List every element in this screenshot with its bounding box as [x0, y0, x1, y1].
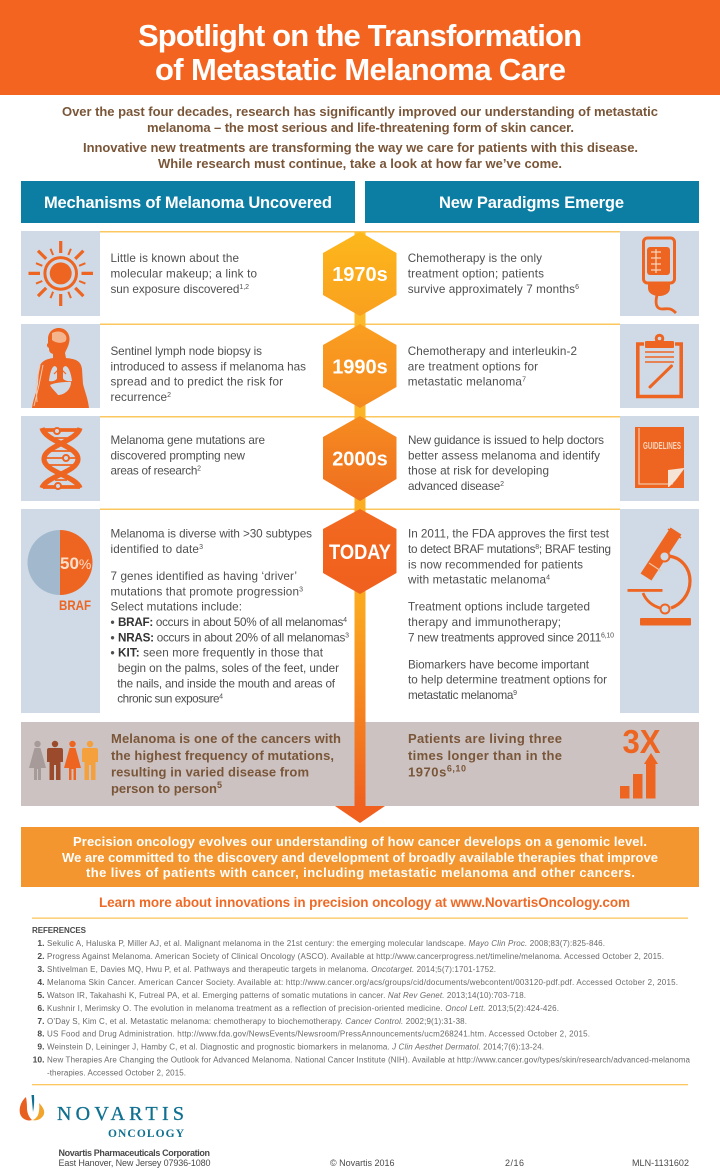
mutation list: •	[110, 631, 115, 644]
icon: body	[21, 324, 100, 408]
references: 7.	[37, 1016, 44, 1026]
mutation list	[110, 616, 349, 706]
callout: survival: 6,10	[447, 764, 466, 774]
text: today mechanisms: 7 genes identified as having ‘driver’	[110, 570, 297, 583]
references: 9.	[37, 1042, 44, 1052]
text: today mechanisms: 3	[299, 586, 303, 593]
text: 1990s mechanisms: 2	[167, 392, 171, 399]
icon: IV bag	[620, 231, 699, 316]
references	[32, 926, 691, 1078]
references: 10.	[33, 1055, 44, 1065]
text: 1970s mechanisms	[110, 252, 257, 296]
callout: mutations	[111, 731, 341, 796]
hexagon: 1970s	[323, 232, 396, 316]
mutation list: 3	[345, 632, 349, 639]
hexagon: 1990s	[323, 324, 396, 408]
footer	[58, 1148, 689, 1168]
text: 1990s mechanisms	[110, 345, 306, 404]
text: 1970s mechanisms: molecular makeup; a link to	[110, 268, 257, 280]
text: 2000s mechanisms: areas of research	[110, 465, 197, 478]
icon: guidelines book: GUIDELINES	[643, 441, 681, 452]
references: 4.	[37, 977, 44, 987]
text: today paradigms: 8	[535, 544, 539, 551]
title banner: of Metastatic Melanoma Care	[155, 52, 566, 87]
rule	[32, 918, 688, 919]
references: Watson IR, Takahashi K, Futreal PA, et al. Emerging patterns of somatic mutations in cancer. Nat Rev Genet. 2013;14(10):703-718.	[47, 991, 526, 1000]
hexagon: today: TODAY	[329, 541, 391, 564]
row rule today	[100, 508, 620, 510]
mutation list: KIT: seen more frequently in those that	[118, 647, 324, 660]
text: 2000s mechanisms: Melanoma gene mutations are	[110, 434, 265, 447]
banner: precision oncology: the lives of patients with cancer, including metastatic melanoma and other cancers.	[86, 865, 635, 880]
text: today paradigms: is now recommended for patients	[408, 558, 583, 571]
hexagon: 1990s: 1990s	[332, 356, 388, 378]
heading: mechanisms: Mechanisms of Melanoma Uncovered	[44, 194, 332, 212]
intro text: While research must continue, take a look at how far we’ve come.	[158, 156, 562, 171]
references: US Food and Drug Administration. http://www.fda.gov/NewsEvents/Newsroom/PressAnnouncements/ucm268241.htm. Accessed October 2, 2015.	[47, 1030, 590, 1039]
references: REFERENCES	[32, 926, 87, 935]
icon: people	[29, 741, 98, 780]
text: today mechanisms: Melanoma is diverse with >30 subtypes	[110, 528, 312, 541]
footer: Novartis Pharmaceuticals Corporation	[58, 1148, 210, 1158]
timeline arrow	[335, 232, 385, 823]
callout: mutations: the highest frequency of mutations,	[111, 748, 334, 763]
intro text: Over the past four decades, research has significantly improved our understanding of metastatic	[62, 104, 658, 119]
text: today paradigms: metastatic melanoma	[408, 689, 513, 702]
text: 2000s paradigms	[408, 434, 604, 493]
text: 1990s mechanisms: introduced to assess if melanoma has	[110, 360, 306, 373]
callout: mutations: 5	[217, 780, 222, 790]
text: 2000s mechanisms	[110, 434, 265, 478]
references: -therapies. Accessed October 2, 2015.	[47, 1069, 186, 1078]
logo: Novartis Oncology	[20, 1095, 185, 1140]
callout: survival	[408, 731, 562, 780]
band: summary	[21, 722, 699, 806]
references: Sekulic A, Haluska P, Miller AJ, et al. Malignant melanoma in the 21st century: the emerging molecular landscape. Mayo Clin Proc. 2008;83(7):825-846.	[47, 939, 605, 948]
text: today paradigms: 4	[546, 575, 550, 582]
text: today paradigms: therapy and immunotherapy;	[408, 616, 561, 629]
row rule 1990s	[100, 324, 620, 325]
text: 1970s mechanisms: 1,2	[239, 284, 249, 291]
row rule 2000s	[100, 416, 620, 418]
text: 1990s paradigms: are treatment options for	[408, 360, 538, 373]
text: 1970s paradigms: 6	[575, 284, 579, 291]
text: today paradigms: Treatment options include targeted	[408, 601, 590, 614]
text: today paradigms	[407, 528, 614, 702]
icon: BRAF pie chart: BRAF	[59, 597, 91, 613]
logo: Novartis Oncology: NOVARTIS	[57, 1103, 184, 1125]
row rule 1970s	[100, 231, 620, 232]
text: 1970s paradigms: treatment option; patients	[408, 268, 544, 280]
text: 1970s paradigms: survive approximately 7 months	[408, 283, 575, 296]
text: today paradigms: with metastatic melanoma	[408, 574, 546, 587]
icon: BRAF pie chart	[21, 509, 100, 713]
icon: DNA	[21, 416, 100, 501]
text: today paradigms: 9	[513, 690, 517, 697]
references: 2.	[37, 951, 44, 961]
mutation list: NRAS: occurs in about 20% of all melanomas	[118, 631, 345, 644]
text: today paradigms: to detect BRAF mutations	[408, 543, 535, 556]
text: 1990s paradigms	[408, 345, 577, 389]
text: 2000s paradigms: 2	[500, 481, 504, 488]
mutation list: begin on the palms, soles of the feet, under	[118, 662, 339, 675]
mutation list: chronic sun exposure	[117, 693, 220, 706]
hexagon: 2000s: 2000s	[332, 448, 388, 470]
mutation list: 4	[343, 617, 347, 624]
banner: precision oncology: We are committed to the discovery and development of broadly available therapies that improve	[62, 850, 658, 865]
text: 2000s mechanisms: 2	[197, 466, 201, 473]
mutation list: BRAF: occurs in about 50% of all melanomas	[118, 616, 343, 629]
banner: precision oncology: Precision oncology evolves our understanding of how cancer develops on a genomic level.	[73, 834, 647, 849]
banner: precision oncology	[21, 827, 699, 887]
mutation list: •	[110, 616, 115, 629]
icon: flame	[20, 1095, 44, 1120]
text: today mechanisms	[110, 528, 349, 706]
title banner	[0, 0, 720, 95]
intro text	[62, 104, 658, 171]
mutation list: 4	[219, 694, 223, 701]
callout: mutations: resulting in varied disease from	[111, 765, 309, 780]
icon: 3X growth: 3X	[622, 723, 660, 760]
text: 1990s paradigms: Chemotherapy and interleukin-2	[408, 345, 577, 358]
text: today paradigms: ; BRAF testing	[539, 543, 611, 556]
heading: paradigms	[365, 181, 699, 223]
text: 1990s paradigms: metastatic melanoma	[408, 376, 522, 389]
text: today mechanisms: identified to date	[110, 543, 199, 556]
icon: clipboard	[620, 324, 699, 408]
references: Kushnir I, Merimsky O. The evolution in melanoma treatment as a reflection of precision-oriented medicine. Oncol Lett. 2013;5(2):424-426.	[47, 1004, 559, 1013]
text: today paradigms: to help determine treatment options for	[408, 674, 607, 687]
text: 1990s mechanisms: spread and to predict the risk for	[110, 376, 283, 389]
icon: sun	[21, 231, 100, 316]
footer: East Hanover, New Jersey 07936-1080	[58, 1158, 210, 1168]
text: 2000s paradigms: New guidance is issued to help doctors	[408, 434, 604, 447]
logo: Novartis Oncology: ONCOLOGY	[108, 1128, 185, 1140]
rule	[32, 1084, 688, 1085]
footer: © Novartis 2016	[330, 1158, 394, 1168]
mutation list: •	[110, 647, 115, 660]
text: 1970s paradigms: Chemotherapy is the only	[408, 252, 542, 265]
icon: BRAF pie chart: 50%	[60, 554, 91, 573]
references: O’Day S, Kim C, et al. Metastatic melanoma: chemotherapy to biochemotherapy. Cancer Control. 2002;9(1):31-38.	[47, 1017, 467, 1026]
references: 3.	[37, 964, 44, 974]
text: today paradigms: In 2011, the FDA approves the first test	[408, 528, 610, 541]
hexagon: 1970s: 1970s	[332, 264, 388, 286]
intro text: melanoma – the most serious and life-threatening form of skin cancer.	[147, 120, 574, 135]
text: today paradigms: Biomarkers have become important	[408, 658, 590, 671]
icon: guidelines book	[620, 416, 699, 501]
callout: survival: 1970s	[408, 765, 446, 780]
callout: mutations: person to person	[111, 781, 217, 796]
references: Shtivelman E, Davies MQ, Hwu P, et al. Pathways and therapeutic targets in melanoma. Oncotarget. 2014;5(7):1701-1752.	[47, 965, 496, 974]
icon: microscope	[620, 509, 699, 713]
references: 6.	[37, 1003, 44, 1013]
title banner: Spotlight on the Transformation	[138, 18, 582, 53]
text: today mechanisms: 3	[199, 544, 203, 551]
text: 1970s mechanisms: Little is known about the	[110, 252, 239, 265]
text: today mechanisms: Select mutations include:	[110, 601, 242, 614]
references: Progress Against Melanoma. American Society of Clinical Oncology (ASCO). Available at http://www.cancerprogress.net/timeline/melanoma. Accessed October 2, 2015.	[47, 952, 664, 961]
text: 2000s paradigms: those at risk for developing	[408, 465, 549, 478]
references: New Therapies Are Changing the Outlook for Advanced Melanoma. National Cancer Institute (NIH). Available at http://www.cancer.gov/types/skin/research/advanced-melanoma	[47, 1056, 691, 1065]
callout: survival: Patients are living three	[408, 731, 562, 746]
text: 1990s paradigms: 7	[522, 377, 526, 384]
footer: MLN-1131602	[632, 1158, 689, 1168]
references: 1.	[37, 938, 44, 948]
call to action: Learn more about innovations in precision oncology at www.NovartisOncology.com	[99, 895, 630, 910]
references: Melanoma Skin Cancer. American Cancer Society. Available at: http://www.cancer.org/acs/groups/cid/documents/webcontent/003120-pdf.pdf. Accessed October 2, 2015.	[47, 978, 678, 987]
text: 2000s paradigms: better assess melanoma and identify	[408, 449, 600, 462]
text: 2000s paradigms: advanced disease	[408, 480, 500, 493]
text: 1970s paradigms	[408, 252, 579, 296]
intro text: Innovative new treatments are transforming the way we care for patients with this disease.	[83, 140, 638, 155]
callout: survival: times longer than in the	[408, 748, 562, 763]
footer: 2/16	[505, 1158, 524, 1168]
text: 2000s mechanisms: discovered prompting new	[110, 449, 246, 462]
heading: paradigms: New Paradigms Emerge	[439, 194, 624, 212]
text: today paradigms: 7 new treatments approved since 2011	[408, 631, 601, 644]
text: 1990s mechanisms: Sentinel lymph node biopsy is	[110, 345, 262, 358]
text: today mechanisms: mutations that promote progression	[110, 585, 299, 598]
references: 8.	[37, 1029, 44, 1039]
references: Weinstein D, Leininger J, Hamby C, et al. Diagnostic and prognostic biomarkers in melanoma. J Clin Aesthet Dermatol. 2014;7(6):13-24.	[47, 1043, 544, 1052]
text: 1970s mechanisms: sun exposure discovered	[110, 283, 239, 296]
hexagon: today	[323, 509, 396, 594]
references: 5.	[37, 990, 44, 1000]
icon: 3X growth	[620, 723, 660, 798]
mutation list: the nails, and inside the mouth and areas of	[117, 677, 336, 690]
callout: mutations: Melanoma is one of the cancers with	[111, 731, 341, 746]
text: today paradigms: 6,10	[601, 632, 614, 639]
text: 1990s mechanisms: recurrence	[110, 391, 167, 404]
heading: mechanisms	[21, 181, 355, 223]
hexagon: 2000s	[323, 416, 396, 501]
